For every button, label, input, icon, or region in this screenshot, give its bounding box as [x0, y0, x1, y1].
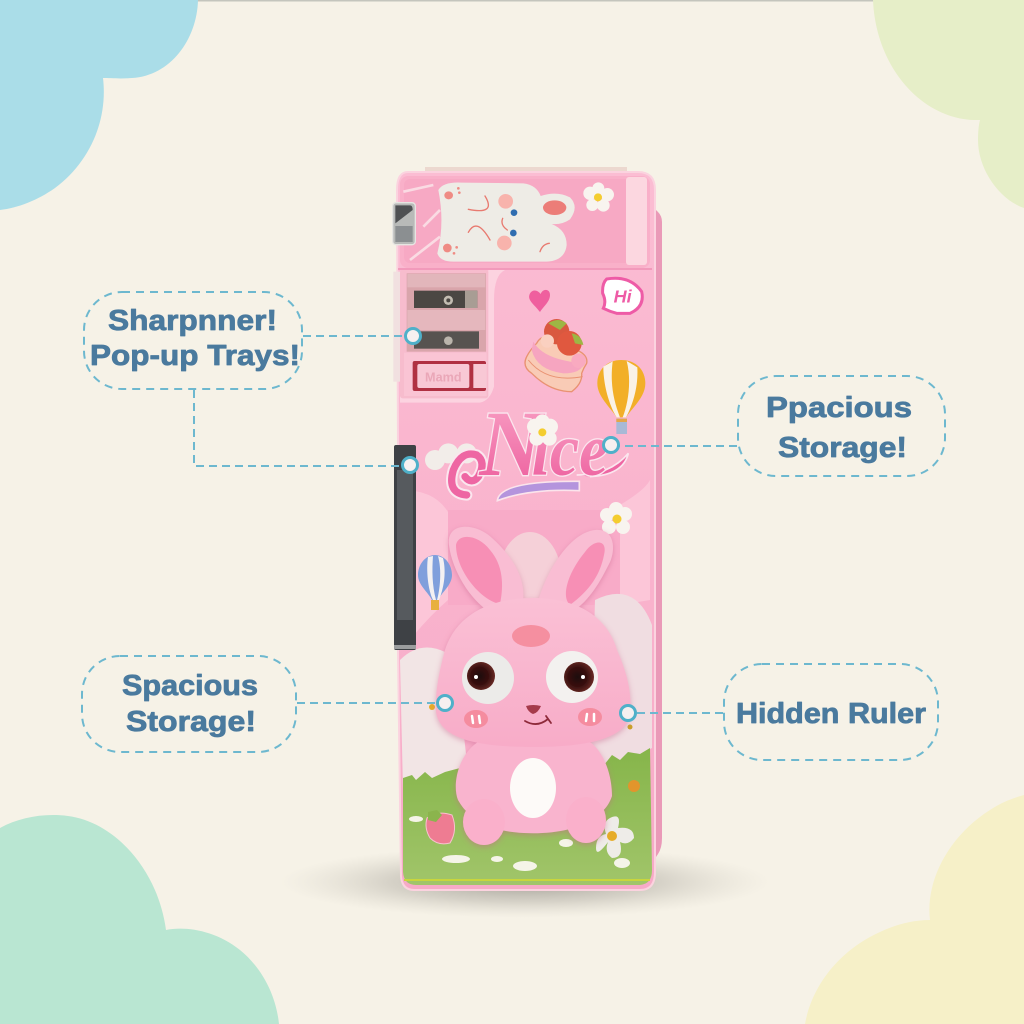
pencil case product [393, 167, 662, 890]
pointer dot: sharpener [406, 328, 420, 344]
label: hidden ruler: Hidden Ruler [736, 698, 926, 730]
case body [397, 172, 655, 890]
small yellow marks [429, 704, 435, 710]
ear right [538, 530, 613, 612]
Nice lettering sticker [425, 393, 628, 501]
label: spacious: Spacious [122, 670, 258, 702]
Hi speech bubble [603, 278, 642, 313]
decorative cloud: top left blue [0, 0, 198, 210]
top seal strip [425, 167, 627, 175]
pointer dot [620, 706, 636, 720]
foot right [566, 797, 606, 843]
blue hot air balloon sticker [418, 555, 452, 610]
pointer dot [604, 438, 618, 452]
callout: spacious storage upper right [604, 376, 945, 476]
cheeks [464, 708, 602, 728]
sharpener tray [393, 270, 505, 403]
Hi speech bubble: Hi [614, 287, 633, 307]
label: sharpener: Sharpnner! [108, 305, 277, 337]
sharpener tray: Mamd [425, 370, 462, 384]
white bunny sticker [403, 183, 575, 262]
rabbit figure [436, 527, 630, 845]
foot left [463, 799, 505, 845]
grass panel [403, 748, 652, 885]
decorative cloud: bottom left mint [0, 815, 279, 1024]
callout: hidden ruler [620, 664, 938, 760]
cake sticker [525, 319, 587, 392]
white flower sticker [583, 182, 614, 212]
forehead spot [512, 625, 550, 647]
metal side clip [394, 445, 416, 650]
label: pop-up trays: Pop-up Trays! [90, 340, 300, 372]
eye left [462, 652, 514, 704]
big white flower [596, 816, 634, 858]
decorative cloud: bottom right yellow [805, 795, 1024, 1024]
orange flower [628, 780, 640, 792]
pointer dot: trays [402, 458, 418, 472]
Nice lettering sticker: N [478, 393, 546, 496]
eye right [546, 651, 598, 703]
belly [510, 758, 556, 818]
ground shadow [280, 846, 770, 918]
strawberry [426, 813, 455, 844]
pale background shapes [400, 480, 652, 790]
Nice lettering sticker: ice [532, 409, 608, 492]
yellow hot air balloon sticker [597, 360, 645, 434]
callout: spacious storage lower left [82, 656, 452, 752]
decorative cloud: top right green [873, 0, 1024, 208]
ear left [449, 527, 523, 612]
small daisies [409, 816, 630, 871]
label: storage: Storage! [126, 706, 256, 738]
lid panel [398, 176, 652, 269]
label: ppacious: Ppacious [766, 392, 912, 424]
body [456, 742, 612, 833]
head [436, 598, 630, 747]
case side edge [650, 204, 662, 866]
white flower sticker mid [600, 502, 632, 534]
nose and mouth [526, 705, 541, 714]
callout: sharpener and pop-up trays [84, 292, 420, 466]
metal clip top [393, 203, 415, 245]
heart sticker [529, 290, 550, 312]
pointer dot [438, 696, 452, 710]
label: storage: Storage! [778, 432, 907, 464]
